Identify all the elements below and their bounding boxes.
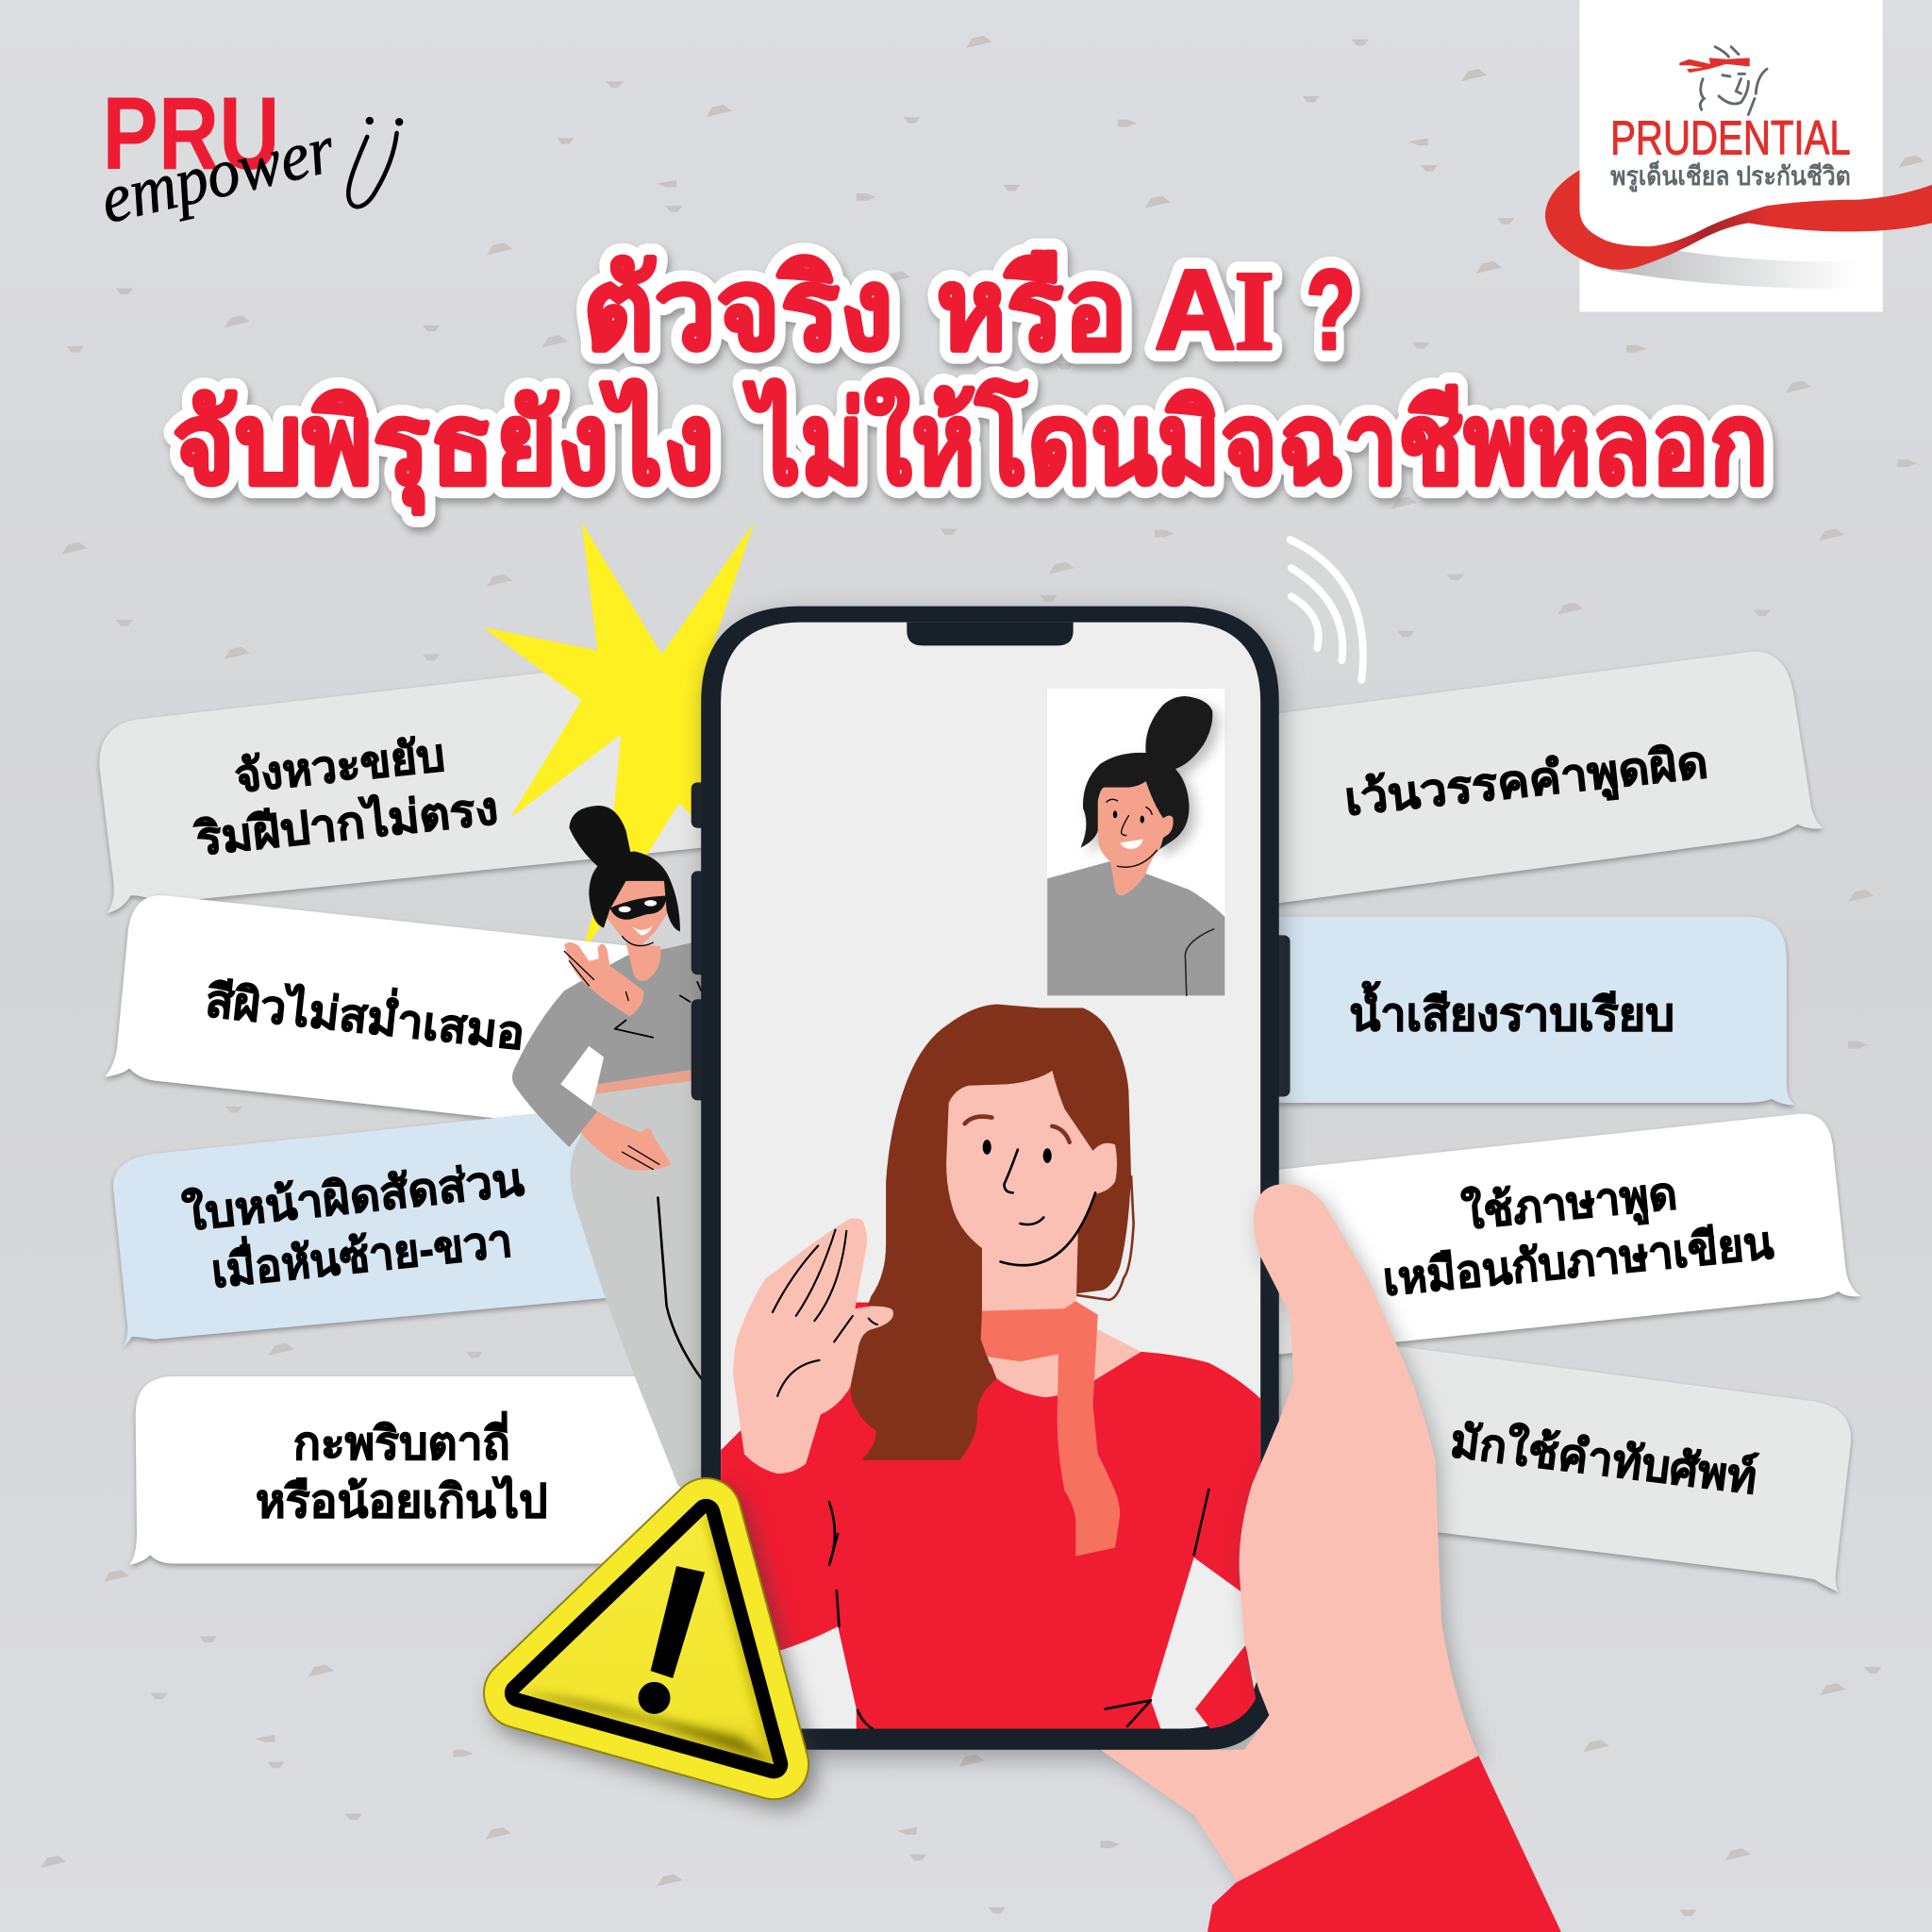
face and neck [946, 1071, 1117, 1324]
bubble text: face proportion: เมื่อหันซ้าย-ขวา [208, 1208, 515, 1298]
title [173, 247, 1768, 515]
title line 1 outline: ? [1306, 247, 1356, 374]
torso [512, 939, 708, 1147]
bubble text: blinking [256, 1410, 548, 1527]
bubble: word spacing [1269, 652, 1824, 905]
bubble: face proportion [113, 1102, 653, 1347]
bubble text: word spacing: เว้นวรรคคำพูดผิด [1342, 737, 1710, 828]
title line 1 fill: ? [1306, 247, 1356, 374]
title line 2 outline: จับพิรุธยังไง [173, 379, 715, 515]
logo: PRU empower U [93, 76, 403, 238]
logo: Prudential card [1545, 0, 1932, 311]
dark rim [519, 1513, 774, 1764]
main woman on screen [720, 1004, 1261, 1730]
notch [907, 623, 1074, 645]
hand [1100, 1184, 1478, 1885]
chest [982, 1329, 1141, 1397]
bubble text: loanwords: มักใช้คำทับศัพท์ [1448, 1414, 1759, 1504]
bubble: loanwords [1281, 1331, 1851, 1592]
bubble: uneven skin [105, 895, 690, 1140]
title line 1 outline: I [1235, 248, 1274, 374]
yellow starburst [483, 523, 754, 955]
exclamation mark [651, 1566, 705, 1678]
title line 2 outline: ไม่ให้โดนมิจฉาชีพหลอก [742, 378, 1768, 508]
phone corner over hand [1096, 1690, 1269, 1750]
screen [721, 623, 1260, 1728]
scarf [981, 1301, 1120, 1557]
title line 2 outline [173, 378, 1768, 515]
wordmark: PRUDENTIAL [1610, 110, 1851, 164]
title line 1 fill [583, 247, 1356, 374]
bubble text: uneven skin: สีผิวไม่สม่ำเสมอ [203, 968, 528, 1059]
inner shading [519, 1509, 778, 1764]
bubble text: blinking: กะพริบตาถี่ [293, 1410, 510, 1469]
sleeve [1208, 1756, 1561, 1932]
title line 1 fill: ตัวจริง [583, 247, 893, 374]
hair back [851, 1004, 1131, 1460]
face features [965, 1117, 1095, 1265]
mascot head [1679, 47, 1767, 114]
title line 1 outline: ตัวจริง [583, 247, 893, 374]
title line 1 fill: หรือ [937, 247, 1127, 374]
title line 1 outline [583, 247, 1356, 374]
Thai wordmark: พรูเด็นเชียล ประกันชีวิต [1610, 159, 1851, 192]
bubble text: flat voice: น้ำเสียงราบเรียบ [1349, 981, 1674, 1041]
inset head [1080, 696, 1212, 896]
title line 1 fill: I [1235, 248, 1274, 374]
black band [519, 1513, 774, 1764]
belly [595, 1066, 702, 1094]
title line 2 fill: ไม่ให้โดนมิจฉาชีพหลอก [742, 378, 1768, 508]
raised hand [564, 942, 643, 1017]
yellow outer [519, 1513, 774, 1764]
bubble: flat voice [1269, 917, 1795, 1106]
bubble text: blinking: หรือน้อยเกินไป [256, 1474, 548, 1527]
bubble: written language [1269, 1114, 1860, 1356]
bubble text: lip sync [192, 730, 501, 865]
raised hand [733, 1219, 893, 1474]
title line 2 fill [173, 378, 1768, 515]
neck [626, 942, 660, 981]
phone [691, 607, 1291, 1750]
bubble text: written language [1381, 1166, 1775, 1306]
bubble text: lip sync: ริมฝีปากไม่ตรง [192, 781, 501, 865]
lower hand [580, 1111, 672, 1171]
title line 2 fill: จับพิรุธยังไง [173, 379, 715, 515]
logo: PRU empower U: empower [93, 110, 341, 238]
trousers [570, 1072, 740, 1541]
bubble: blinking [129, 1376, 690, 1565]
wifi signal arcs [1291, 540, 1363, 680]
sleeve and clothing lines [829, 1490, 1208, 1728]
phone body [701, 607, 1279, 1750]
bubble text: lip sync: จังหวะขยับ [232, 730, 447, 803]
logo: PRU empower U: PRU [102, 76, 279, 192]
title line 1 outline: A [1155, 247, 1236, 374]
bubble text: written language: ใช้ภาษาพูด [1459, 1166, 1679, 1242]
warning triangle [519, 1509, 778, 1764]
red ribbon [1545, 170, 1932, 270]
white card [1579, 0, 1883, 311]
bubble text: written language: เหมือนกับภาษาเขียน [1381, 1217, 1775, 1306]
yellow inner [519, 1513, 774, 1764]
title line 1 outline: หรือ [937, 247, 1127, 374]
bubble text: face proportion: ใบหน้าผิดสัดส่วน [180, 1152, 526, 1241]
holding hand with sleeve [1096, 1184, 1561, 1932]
video inset [1047, 689, 1224, 995]
title line 1 fill: A [1155, 247, 1236, 374]
bubble text: face proportion [180, 1152, 526, 1298]
thief woman peeking behind phone [512, 806, 740, 1541]
side buttons [691, 782, 1291, 1100]
bubble: lip sync [99, 653, 715, 913]
red top [720, 1303, 1261, 1730]
grey swoosh [1607, 250, 1859, 289]
head [569, 806, 680, 949]
